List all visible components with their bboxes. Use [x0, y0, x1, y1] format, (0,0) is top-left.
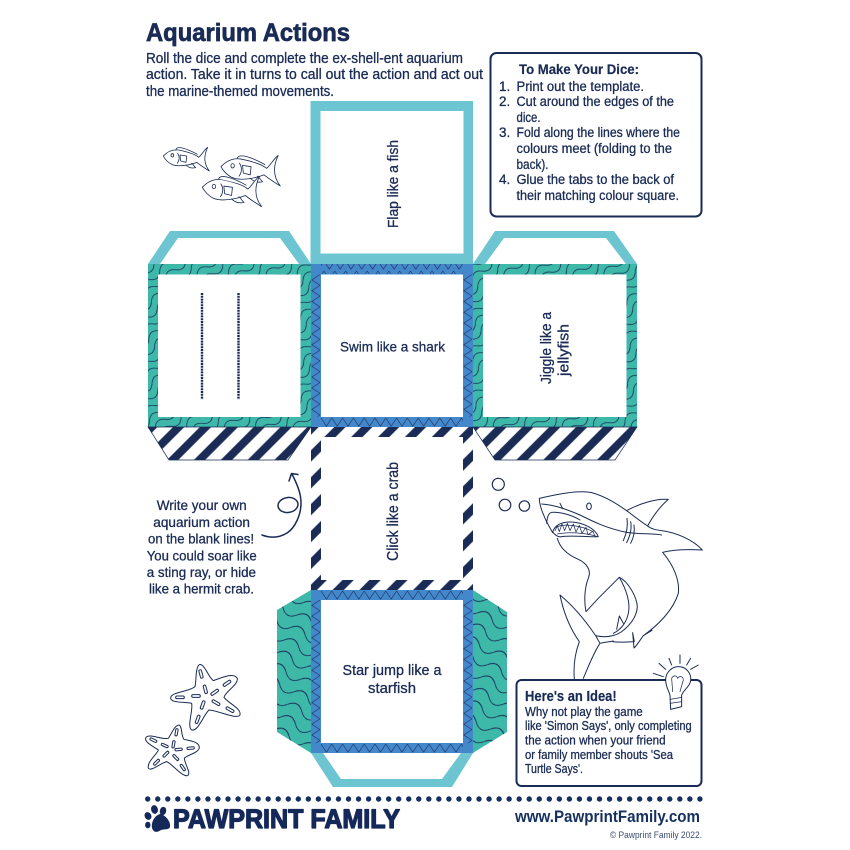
bubbles	[492, 478, 530, 511]
title: Aquarium Actions	[146, 19, 350, 47]
fish lower large	[202, 176, 262, 207]
panel: here's an idea	[516, 680, 702, 786]
dice face: flap like a fish	[310, 101, 473, 264]
arrow: curly	[262, 474, 301, 537]
website url: www.PawprintFamily.com	[514, 807, 700, 826]
callout: write your own action: You could soar like	[147, 548, 257, 564]
icon: lightbulb	[653, 655, 698, 709]
dice face: jiggle like a jellyfish: Jiggle like a	[539, 311, 555, 384]
icon: large starfish	[171, 664, 240, 730]
dice face: star jump like a starfish: starfish	[368, 681, 416, 697]
dice face: click like a crab	[311, 427, 473, 590]
panel: how to make your dice: Fold along the lines where the	[516, 125, 680, 140]
fish upper large	[221, 155, 280, 186]
tab: green wave right	[473, 590, 507, 753]
panel: here's an idea: Here's an Idea!	[525, 689, 617, 705]
dice face: flap like a fish: Flap like a fish	[386, 140, 402, 228]
panel: how to make your dice: dice.	[516, 110, 540, 125]
logo: paw icon	[143, 804, 170, 832]
callout: write your own action: a sting ray, or hide	[147, 564, 256, 580]
copyright: © Pawprint Family 2022.	[610, 830, 702, 841]
panel: here's an idea: Why not play the game	[525, 704, 643, 719]
panel: here's an idea: the action when your friend	[525, 732, 666, 748]
panel: here's an idea: like 'Simon Says', only completing	[525, 718, 692, 733]
panel: how to make your dice: 2.	[499, 94, 510, 109]
dice face: swim like a shark	[311, 264, 473, 427]
dice face: star jump like a starfish: Star jump like a	[342, 663, 442, 679]
tab: teal bottom	[311, 753, 473, 787]
intro text: action. Take it in turns to call out the action and act out	[146, 67, 483, 83]
icon: shark	[539, 492, 702, 679]
tab: striped left	[148, 427, 311, 460]
panel: how to make your dice: back).	[516, 157, 548, 172]
dice face: click like a crab: Click like a crab	[385, 462, 402, 561]
panel: here's an idea: or family member shouts 'Sea	[525, 747, 674, 762]
panel: here's an idea: Turtle Says'.	[525, 761, 583, 776]
dice face: blank lines	[148, 264, 311, 427]
panel: how to make your dice	[490, 53, 702, 216]
panel: how to make your dice: Print out the template.	[516, 79, 644, 94]
panel: how to make your dice: colours meet (folding to the	[516, 141, 672, 156]
dice face: jiggle like a jellyfish: jellyfish	[556, 324, 572, 377]
intro text: the marine-themed movements.	[146, 84, 334, 100]
dice face: star jump like a starfish	[311, 590, 473, 753]
callout: write your own action: aquarium action	[153, 514, 250, 530]
tab: teal top left	[148, 231, 311, 264]
fish small	[163, 147, 209, 171]
icon: small starfish	[146, 725, 199, 776]
tab: striped right	[473, 427, 637, 460]
tab: teal top right	[473, 231, 637, 264]
dice face: swim like a shark: Swim like a shark	[340, 338, 446, 354]
panel: how to make your dice: To Make Your Dice:	[519, 61, 639, 77]
intro text	[146, 51, 483, 100]
icon: three fish	[163, 147, 280, 207]
dice face: jiggle like a jellyfish	[473, 264, 637, 427]
intro text: Roll the dice and complete the ex-shell-ent aquarium	[146, 51, 463, 67]
panel: how to make your dice: Cut around the edges of the	[516, 94, 674, 109]
tab: green wave left	[277, 590, 311, 753]
callout: write your own action: Write your own	[157, 497, 247, 513]
panel: how to make your dice: 3.	[499, 125, 510, 140]
callout: write your own action	[147, 497, 257, 596]
panel: how to make your dice: Glue the tabs to the back of	[516, 172, 674, 187]
callout: write your own action: like a hermit crab.	[149, 580, 254, 596]
panel: how to make your dice: their matching colour square.	[516, 188, 679, 203]
panel: how to make your dice: 4.	[499, 172, 510, 187]
callout: write your own action: on the blank lines!	[148, 530, 254, 546]
logo: wordmark: PAWPRINT FAMILY	[173, 804, 400, 834]
panel: how to make your dice: 1.	[499, 79, 510, 94]
